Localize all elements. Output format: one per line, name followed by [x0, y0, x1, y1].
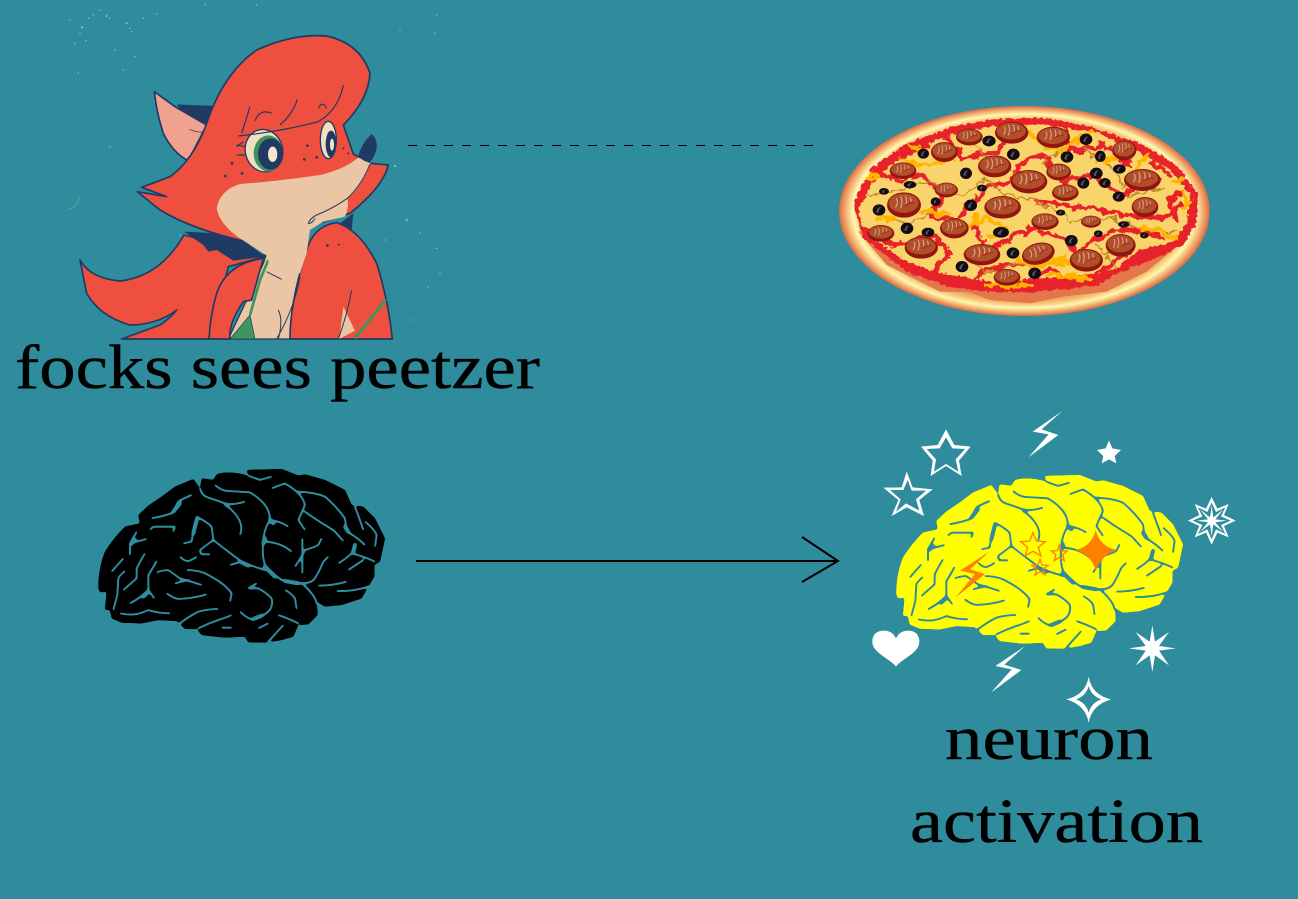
olives — [873, 134, 1149, 279]
icon: orange four-point star — [1075, 530, 1117, 571]
activation sparkles — [872, 411, 1236, 723]
icon: lightning bolt — [1028, 411, 1062, 457]
fox ear — [154, 92, 214, 161]
caption: neuron activation — [910, 705, 1203, 856]
fox tail hair — [80, 235, 267, 339]
dashed line: sees — [408, 144, 815, 146]
yellow activated brain — [896, 475, 1183, 649]
icon: orange outline stars — [1021, 533, 1067, 575]
fox hair lines and freckles — [237, 85, 343, 155]
icon: heart — [872, 631, 919, 667]
icon: small star — [1097, 441, 1121, 463]
icon: white outline star — [921, 429, 971, 476]
icon: lightning bolt 2 — [991, 646, 1025, 693]
caption: neuron activation: neuron — [945, 705, 1153, 773]
fox eyes — [241, 121, 336, 176]
melted sauce veins — [863, 125, 1183, 282]
arrow — [416, 537, 838, 582]
caption: focks sees peetzer: focks sees peetzer — [15, 334, 540, 402]
icon: white outline star 2 — [883, 472, 933, 516]
caption: neuron activation: activation — [910, 788, 1203, 856]
pepperoni slices — [868, 122, 1161, 286]
fox muzzle — [217, 157, 371, 277]
black brain — [98, 469, 385, 643]
icon: eight-point outline star — [1188, 497, 1236, 545]
fox body — [228, 233, 308, 339]
fox head and hair — [137, 36, 388, 242]
pizza cheese — [858, 124, 1190, 283]
image: fox character — [68, 4, 441, 339]
pizza crust — [839, 106, 1210, 316]
melted cheese swirls — [867, 142, 1177, 275]
fox nose — [358, 134, 377, 163]
icon: white spark — [1129, 625, 1176, 672]
icon: four-point outline sparkle — [1066, 677, 1111, 723]
icon: orange bolt — [956, 552, 989, 597]
pizza sauce — [853, 118, 1198, 292]
image: pizza — [839, 106, 1210, 316]
